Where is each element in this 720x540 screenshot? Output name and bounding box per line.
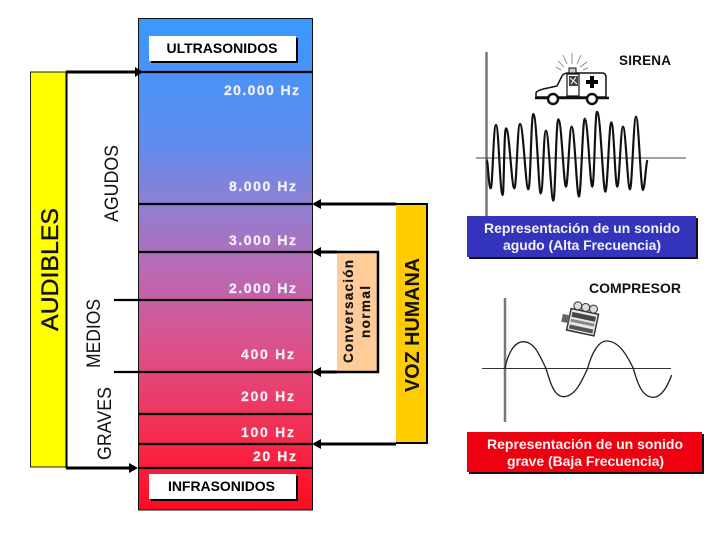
frequency labels: 3.000 Hz — [229, 232, 296, 248]
caption: low frequency: Representación de un sonido — [487, 436, 683, 452]
label: medios: MEDIOS — [84, 299, 105, 368]
chart: siren waveform — [476, 52, 686, 216]
frequency labels: 20 Hz — [253, 448, 296, 464]
frequency labels: 2.000 Hz — [229, 280, 296, 296]
heading: compresor: COMPRESOR — [589, 280, 681, 296]
caption: high frequency: Representación de un sonido — [484, 220, 680, 236]
arrow: upper audible limit — [66, 67, 143, 77]
frequency labels: 200 Hz — [241, 388, 294, 404]
arrows: voice ranges — [312, 199, 396, 449]
caption: low frequency: grave (Baja Frecuencia) — [507, 453, 664, 469]
chart: low-frequency waveform — [482, 298, 672, 422]
frequency labels: 400 Hz — [241, 346, 294, 362]
frequency labels: 8.000 Hz — [229, 178, 296, 194]
panel: audibles bar: AUDIBLES — [37, 208, 64, 331]
frequency labels — [224, 82, 299, 464]
heading: sirena: SIRENA — [619, 53, 671, 68]
icon: ambulance — [535, 53, 609, 104]
label: ultrasonidos — [149, 36, 298, 63]
caption: low frequency — [467, 432, 704, 474]
label: agudos: AGUDOS — [102, 145, 123, 222]
caption: high frequency: agudo (Alta Frecuencia) — [503, 237, 661, 253]
caption: high frequency — [467, 216, 698, 259]
panel: voz humana — [396, 204, 427, 443]
panel: audibles bar — [30, 72, 66, 468]
panel: voz humana: VOZ HUMANA — [402, 258, 424, 392]
label: ultrasonidos: ULTRASONIDOS — [166, 40, 278, 56]
panel: conversacion normal: Conversación — [341, 260, 356, 363]
label: graves: GRAVES — [95, 387, 116, 460]
label: infrasonidos: INFRASONIDOS — [168, 478, 275, 494]
panel: conversacion normal — [337, 252, 378, 372]
frequency labels: 20.000 Hz — [224, 82, 299, 98]
panel: conversacion normal: normal — [358, 286, 373, 338]
icon: compressor — [560, 299, 600, 336]
frequency scale bar — [114, 18, 313, 510]
label: infrasonidos — [149, 474, 298, 501]
arrow: lower audible limit — [66, 463, 138, 473]
frequency labels: 100 Hz — [241, 424, 294, 440]
